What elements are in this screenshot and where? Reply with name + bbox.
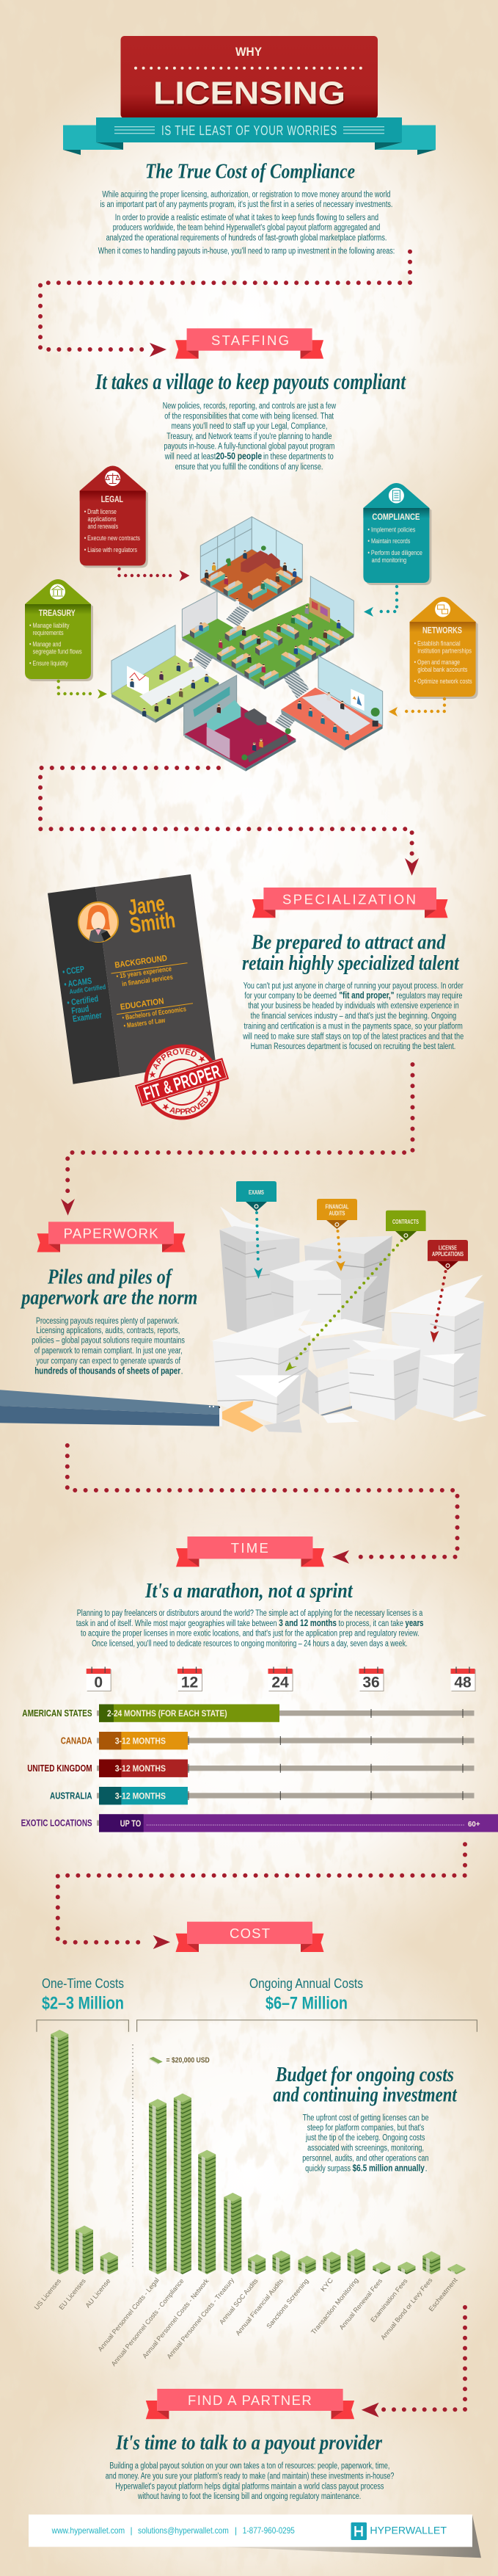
room: reception <box>184 675 296 772</box>
tag: contracts <box>285 1211 426 1371</box>
staffing text: of the responsibilities that come with being licensed. That <box>164 412 334 421</box>
heading: find a partner: It's time to talk to a payout provider <box>115 2431 383 2455</box>
tag: license applications <box>428 1240 468 1343</box>
cost brackets <box>37 2020 477 2032</box>
compliance title: COMPLIANCE <box>372 513 420 522</box>
networks bullets: • Establish financial <box>414 639 461 647</box>
treasury bullets: • Ensure liquidity <box>29 660 68 668</box>
treasury bullets <box>29 622 82 668</box>
row: australia: AUSTRALIA <box>50 1790 92 1801</box>
calendar: 36: 36 <box>362 1674 380 1691</box>
row: united kingdom <box>27 1760 474 1777</box>
treasury bullets: • Manage and <box>29 641 61 649</box>
staffing text: will need at least <box>164 453 216 462</box>
calendar: 24: 24 <box>271 1674 289 1691</box>
pile: middle <box>269 1260 378 1327</box>
icon: scales <box>105 471 120 486</box>
treasury bullets: requirements <box>33 629 64 637</box>
contact details: solutions@hyperwallet.com <box>138 2525 229 2536</box>
panel: treasury <box>25 579 93 681</box>
WHY: WHY <box>235 46 262 59</box>
chart axis labels: Annual Bond or Levy Fees <box>379 2276 434 2341</box>
budget text: steep for platform companies, but that's <box>307 2124 425 2133</box>
row: united kingdom: UNITED KINGDOM <box>27 1763 92 1774</box>
specialization text: for your company to be deemed <box>244 992 337 1001</box>
stack: AU license <box>100 2252 118 2274</box>
chart axis labels: Annual Personnel Costs - Network <box>141 2277 210 2359</box>
pile: right <box>387 1275 486 1422</box>
tag: financial audits <box>317 1199 357 1271</box>
chart axis labels: US Licenses <box>33 2277 62 2311</box>
stack: personnel treasury <box>224 2193 241 2274</box>
specialization text: "fit and proper," <box>339 990 394 1001</box>
arrow: specialization to paperwork <box>61 1064 412 1216</box>
tag: exams: EXAMS <box>249 1189 264 1196</box>
compliance bullets: and monitoring <box>372 556 406 565</box>
row: canada <box>61 1732 474 1749</box>
banner: cost <box>176 1922 324 1952</box>
calendar: 0: 0 <box>94 1674 103 1691</box>
budget text: just the tip of the iceberg. Ongoing costs <box>305 2134 425 2143</box>
networks title: NETWORKS <box>422 627 462 636</box>
room: main open-plan floor <box>182 576 354 689</box>
illustration: isometric office <box>111 517 383 772</box>
banner: paperwork: PAPERWORK <box>64 1226 158 1241</box>
banner: staffing: STAFFING <box>211 333 289 348</box>
certifications: • CCEP <box>62 964 85 977</box>
calendar: 12 <box>177 1666 202 1691</box>
row: australia: 3-12 MONTHS <box>115 1791 166 1802</box>
paperwork text: . <box>180 1367 183 1376</box>
stack: personnel legal <box>149 2099 166 2274</box>
treasury bullets: • Manage liability <box>29 622 70 630</box>
cost headline: one-time: One-Time Costs <box>42 1976 124 1991</box>
calendar: 12: 12 <box>181 1674 198 1691</box>
banner: find a partner: FIND A PARTNER <box>188 2392 312 2408</box>
footer <box>29 2514 481 2558</box>
heading: specialization: Be prepared to attract and <box>251 931 446 954</box>
tag: contracts: CONTRACTS <box>392 1218 419 1225</box>
arrow: compliance to office <box>364 587 397 617</box>
ribbon text: IS THE LEAST OF YOUR WORRIES <box>161 123 337 138</box>
paperwork text: policies – global payout solutions require mountains <box>32 1337 185 1346</box>
stack: escheatment <box>447 2264 465 2274</box>
cost headline: ongoing <box>249 1976 363 2014</box>
certifications: Audit Certified <box>69 983 106 995</box>
ribbon tails <box>63 125 123 150</box>
row: exotic locations <box>21 1814 498 1832</box>
intro text: analyzed the operational requirements of hundreds of fast-growth global marketplace platforms. <box>106 233 387 242</box>
pile: front centre <box>299 1319 384 1415</box>
contact details <box>51 2525 295 2536</box>
chart axis labels: Annual SOC Audits <box>218 2277 260 2326</box>
dotted rule <box>136 67 361 70</box>
row: united kingdom: 3-12 MONTHS <box>115 1763 166 1774</box>
banner: time: TIME <box>231 1540 268 1556</box>
budget text: personnel, audits, and other operations can <box>302 2155 428 2163</box>
background section: in financial services <box>122 973 173 988</box>
chart axis labels: Sanctions Screening <box>265 2277 310 2330</box>
chart axis labels: Annual Renewal Fees <box>338 2277 384 2331</box>
panel: legal <box>80 465 148 568</box>
budget text: . <box>425 2164 428 2173</box>
footer shadow <box>220 2515 481 2558</box>
header: title block <box>63 36 436 155</box>
legal bullets: and renewals <box>87 523 118 531</box>
staffing text: payouts in-house. A fully-functional global payout program <box>164 443 334 451</box>
find a partner text: Building a global payout solution on your own takes a ton of resources: people, paperwork, time, <box>109 2462 389 2471</box>
background section: BACKGROUND <box>114 954 168 970</box>
banner: specialization <box>252 888 447 918</box>
staffing text <box>163 402 337 471</box>
row: canada: CANADA <box>61 1735 92 1746</box>
LICENSING: LICENSING <box>154 76 346 113</box>
intro text: In order to provide a realistic estimate of what it takes to keep funds flowing to sellers and <box>115 214 378 222</box>
illustration: paper piles <box>211 1206 486 1433</box>
heading: paperwork: Piles and piles of <box>47 1265 174 1288</box>
ribbon body <box>96 117 402 142</box>
row: american states: AMERICAN STATES <box>22 1708 92 1719</box>
chart axis labels: Annual Financial Audits <box>234 2277 285 2337</box>
paperwork text: of paperwork to remain compliant. In just one year, <box>34 1346 183 1355</box>
paperwork text: Processing payouts requires plenty of paperwork. <box>36 1317 180 1326</box>
timeline chart <box>21 1666 498 1832</box>
logo: HYPERWALLET <box>370 2525 447 2536</box>
tag: financial audits: AUDITS <box>329 1210 345 1217</box>
legal bullets: applications <box>87 515 117 523</box>
chart axis labels: Annual Personnel Costs - Treasury <box>165 2276 235 2360</box>
panel: networks <box>410 597 478 699</box>
education section: EDUCATION <box>120 997 164 1012</box>
stack: SOC audits <box>248 2254 266 2274</box>
chart axis labels: Annual Personnel Costs - Compliance <box>110 2277 186 2368</box>
icon: bank <box>50 584 65 599</box>
chart axis labels: Transaction Monitoring <box>310 2276 360 2336</box>
logo <box>351 2522 447 2540</box>
arrow: treasury to office <box>59 681 107 699</box>
legal bullets: • Liaise with regulators <box>84 546 137 554</box>
icon: fit and proper stamp: FIT & PROPER <box>142 1061 223 1104</box>
name: Smith <box>128 908 177 938</box>
chart: stacks of money <box>51 2030 466 2274</box>
chart axis labels: Annual Personnel Costs - Legal <box>96 2276 161 2353</box>
staffing text: New policies, records, reporting, and controls are just a few <box>163 402 337 411</box>
treasury title: TREASURY <box>39 609 76 618</box>
staffing text: 20-50 people <box>216 451 262 462</box>
specialization text: regulators may require <box>396 992 462 1001</box>
time text: Once licensed, you'll need to dedicate resources to ongoing monitoring – 24 hours a day, seven days a week. <box>92 1640 407 1649</box>
intro text: While acquiring the proper licensing, authorization, or registration to move money around the world <box>102 190 390 199</box>
paperwork text: Licensing applications, audits, contracts, reports, <box>36 1327 180 1335</box>
icon: fit and proper stamp <box>135 1044 229 1120</box>
networks bullets: institution partnerships <box>417 647 472 655</box>
chart axis labels: Escheatment <box>428 2276 459 2313</box>
networks bullets: • Optimize network costs <box>414 678 472 686</box>
certifications <box>62 964 106 1024</box>
contact details: | <box>131 2525 133 2536</box>
heading: true cost of compliance: The True Cost of Compliance <box>145 160 355 184</box>
row: exotic locations: 60+ <box>468 1820 480 1829</box>
red title panel <box>120 36 378 118</box>
certifications: • ACAMS <box>63 976 92 990</box>
compliance bullets: • Maintain records <box>367 537 411 545</box>
arrow: intro to staffing <box>40 252 410 357</box>
icon: document <box>389 487 404 504</box>
background section <box>111 954 188 988</box>
contact details: 1-877-960-0295 <box>243 2525 295 2536</box>
avatar <box>78 902 118 942</box>
intro text: producers worldwide, the team behind Hyperwallet's global payout platform aggregated and <box>113 224 380 233</box>
time text: years <box>405 1618 424 1628</box>
contact details: www.hyperwallet.com <box>51 2525 125 2536</box>
row: exotic locations: UP TO <box>120 1818 141 1829</box>
compliance bullets <box>367 526 422 565</box>
budget text: quickly surpass <box>305 2164 351 2173</box>
room: training room <box>281 656 383 750</box>
stack: personnel compliance <box>174 2094 191 2274</box>
banner: find a partner <box>146 2389 354 2419</box>
find a partner text: and money. Are you sure your platform's ready to make (and maintain) these investments in-house? <box>106 2472 394 2481</box>
budget text <box>302 2114 429 2173</box>
heading: paperwork: paperwork are the norm <box>20 1286 197 1310</box>
arrow: networks to office <box>389 699 444 716</box>
tag: financial audits: FINANCIAL <box>326 1203 349 1211</box>
legal title: LEGAL <box>101 496 123 504</box>
intro text: When it comes to handling payouts in-house, you'll need to ramp up investment in the following areas: <box>98 247 395 255</box>
heading: budget: Budget for ongoing costs <box>275 2063 454 2086</box>
legend: bill value: = $20,000 USD <box>166 2056 210 2064</box>
room: top executive office <box>200 517 302 612</box>
find a partner text <box>106 2462 394 2501</box>
chart axis labels: EU Licenses <box>57 2277 87 2311</box>
arrow: cost to find a partner <box>362 2307 465 2417</box>
contact details: | <box>235 2525 237 2536</box>
calendar: 0 <box>87 1666 111 1691</box>
heading: specialization <box>242 931 459 975</box>
intro text: is an important part of any payments program, it's just the first in a series of necessary investments. <box>100 200 392 209</box>
legal bullets: • Execute new contracts <box>84 534 140 543</box>
chart axis labels: KYC <box>319 2276 334 2293</box>
tag: exams <box>236 1181 277 1279</box>
certifications: • Certified <box>66 993 99 1008</box>
row: canada: 3-12 MONTHS <box>115 1735 166 1746</box>
calendar: 48: 48 <box>454 1674 472 1691</box>
name: Jane <box>127 891 166 920</box>
networks bullets: global bank accounts <box>417 666 468 674</box>
row: exotic locations: EXOTIC LOCATIONS <box>21 1818 92 1829</box>
find a partner text: without having to foot the licensing bill and ongoing regulatory maintenance. <box>137 2492 361 2501</box>
stairs <box>193 606 310 730</box>
stack: examination fees <box>398 2262 415 2274</box>
stack: renewal fees <box>373 2262 390 2274</box>
heading: budget <box>273 2063 457 2106</box>
education section: • Masters of Law <box>123 1017 166 1030</box>
cost headline: ongoing: $6–7 Million <box>266 1994 348 2014</box>
budget text: associated with screenings, monitoring, <box>307 2144 424 2153</box>
staffing text: ensure that you fulfill the conditions of any license. <box>175 462 323 471</box>
row: american states <box>22 1705 475 1722</box>
stack: US licenses <box>51 2030 68 2274</box>
staffing text: Treasury, and Network teams if you're planning to handle <box>166 432 332 441</box>
banner: staffing <box>175 328 323 359</box>
legal bullets <box>84 508 140 554</box>
networks bullets: • Open and manage <box>414 658 460 667</box>
chart axis labels: AU License <box>84 2277 112 2309</box>
background section: • 15 years experience <box>116 965 172 981</box>
find a partner text: Hyperwallet's payout platform helps digital platforms maintain a world class payout process <box>115 2482 384 2491</box>
paperwork text: hundreds of thousands of sheets of paper <box>34 1365 180 1376</box>
stack: bond or levy fees <box>422 2252 440 2274</box>
resume sheet <box>95 874 216 1077</box>
time text <box>76 1609 424 1649</box>
arrow: time to cost <box>58 1844 465 1949</box>
cost headline: one-time: $2–3 Million <box>42 1994 124 2014</box>
stack: KYC <box>323 2252 340 2274</box>
arrow: legal to office <box>117 567 189 581</box>
staffing text: means you'll need to staff up your Legal, Compliance, <box>171 422 327 431</box>
legal bullets: • Draft license <box>84 508 117 516</box>
banner: paperwork <box>37 1222 185 1252</box>
heading: staffing: It takes a village to keep payouts compliant <box>95 369 406 394</box>
time text: 3 and 12 months <box>279 1618 337 1628</box>
cost headline: ongoing: Ongoing Annual Costs <box>249 1976 363 1991</box>
arrow: staffing to specialization <box>40 768 419 876</box>
pile: front right <box>321 1340 420 1423</box>
tag: license applications: LICENSE <box>439 1244 457 1251</box>
room: lower left meeting room <box>111 625 219 723</box>
stack: personnel network <box>198 2150 216 2274</box>
calendar: 48 <box>450 1666 475 1691</box>
banner: cost: COST <box>230 1926 270 1941</box>
cost headline: one-time <box>42 1976 124 2014</box>
compliance bullets: • Implement policies <box>367 526 416 534</box>
chart axis labels: Examination Fees <box>369 2277 409 2323</box>
stack: sanctions screening <box>299 2256 316 2274</box>
banner: time <box>176 1536 324 1567</box>
footer panel <box>29 2514 472 2547</box>
name <box>127 891 177 938</box>
specialization text <box>242 982 464 1051</box>
arrow: paperwork to time <box>67 1445 458 1564</box>
stack: transaction monitoring <box>348 2249 365 2274</box>
time text: to process, it can take <box>339 1619 403 1628</box>
row: australia <box>50 1787 474 1804</box>
education section: • Bachelors of Economics <box>122 1005 187 1022</box>
stack: financial audits <box>273 2251 290 2274</box>
heading: time: It's a marathon, not a sprint <box>144 1579 353 1603</box>
calendar: 36 <box>359 1666 384 1691</box>
LICENSING: LICENSING <box>153 76 345 112</box>
budget text: The upfront cost of getting licenses can be <box>303 2114 429 2122</box>
illustration: resume of Jane Smith <box>48 874 216 1084</box>
legend: bill value <box>150 2056 210 2064</box>
icon: fit and proper stamp: ★ APPROVED ★ <box>162 1089 213 1114</box>
compliance bullets: • Perform due diligence <box>367 549 422 557</box>
education section <box>117 997 193 1030</box>
stack: EU licenses <box>76 2226 93 2274</box>
tag: license applications: APPLICATIONS <box>432 1250 464 1258</box>
certifications: Examiner <box>72 1010 103 1024</box>
pile: back centre <box>304 1236 392 1331</box>
icon: network chat <box>435 602 450 617</box>
paperwork text <box>32 1317 185 1376</box>
networks bullets <box>414 639 472 686</box>
staffing text: in these departments to <box>263 453 334 462</box>
certifications: Fraud <box>70 1004 89 1016</box>
ribbon rules <box>114 127 384 134</box>
calendar: 24 <box>268 1666 293 1691</box>
banner: specialization: SPECIALIZATION <box>282 892 416 907</box>
time text: task in and of itself. While most major geographies will take between <box>76 1619 277 1628</box>
row: american states: 2-24 MONTHS (FOR EACH STATE) <box>107 1708 227 1719</box>
icon: fit and proper stamp: ★ APPROVED ★ <box>149 1048 205 1078</box>
heading: paperwork <box>20 1265 197 1310</box>
panel: compliance <box>363 483 431 585</box>
illustration: hand holding papers <box>0 1390 263 1432</box>
pile: front left <box>211 1309 310 1433</box>
treasury bullets: segregate fund flows <box>33 648 82 656</box>
intro text <box>98 190 395 255</box>
paperwork text: your company can expect to generate upwards of <box>36 1357 181 1365</box>
pile: back left <box>219 1206 299 1336</box>
budget text: $6.5 million annually <box>353 2163 425 2173</box>
chart axis labels <box>33 2276 459 2368</box>
